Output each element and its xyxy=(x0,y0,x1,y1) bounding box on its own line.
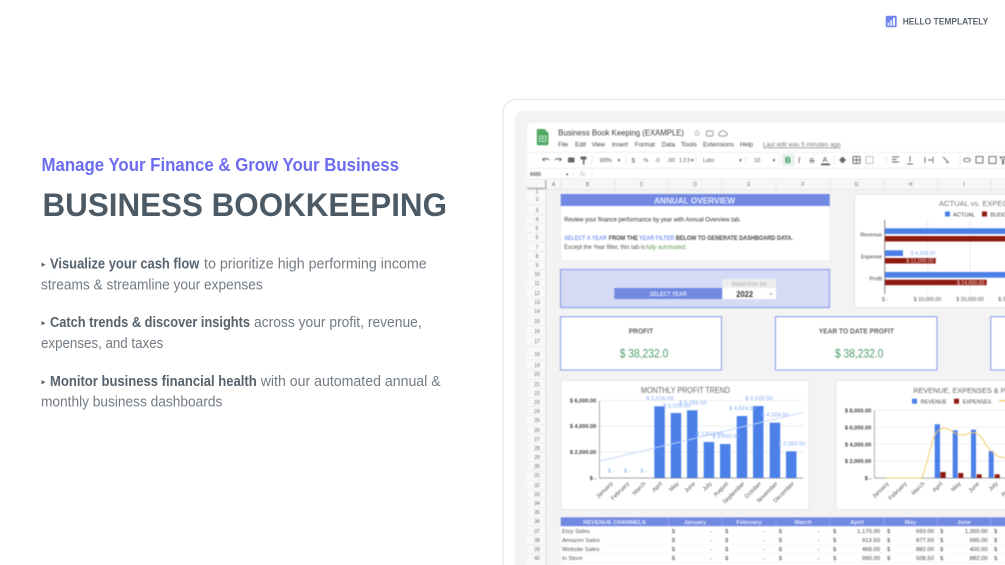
chart: monthly profit trend: $ 4,000.00 xyxy=(570,424,596,430)
row numbers: 24 xyxy=(534,409,540,415)
row numbers: 17 xyxy=(534,339,540,345)
kpi card: year to date profit xyxy=(776,317,937,370)
row numbers: 5 xyxy=(536,226,539,232)
table: revenue channels: $ xyxy=(940,556,944,562)
chart: revenue, expenses and profit: June xyxy=(968,481,981,494)
sheets window header: File xyxy=(558,142,568,148)
chart: actual vs expected: Revenue xyxy=(860,233,882,239)
chart: monthly profit trend: $ 2,083.50 xyxy=(778,441,805,447)
table: revenue channels: 468.00 xyxy=(862,547,881,553)
chart: monthly profit trend: $ - xyxy=(590,476,596,482)
chart: monthly profit trend: $ - xyxy=(640,468,647,474)
kpi card: profit: $ 38,232.0 xyxy=(620,348,668,360)
formula bar xyxy=(527,168,1005,179)
table: revenue channels: 877.50 xyxy=(916,538,935,544)
table: revenue channels: May xyxy=(905,520,917,526)
table: revenue channels: $ xyxy=(672,547,676,553)
table: revenue channels: $ xyxy=(779,538,783,544)
column headers xyxy=(527,179,1005,190)
chart: monthly profit trend: $ - xyxy=(624,468,631,474)
row numbers: 8 xyxy=(536,254,539,260)
table: revenue channels: - xyxy=(710,547,712,553)
logo: Hello Templately: HELLO TEMPLATELY xyxy=(903,16,989,26)
bullet 1: visualize cash flow: streams & streamline your expenses xyxy=(41,276,263,293)
row numbers: 21 xyxy=(534,382,540,388)
table: revenue channels: February xyxy=(736,520,762,526)
table: revenue channels: $ xyxy=(725,538,729,544)
sheets window header: View xyxy=(592,142,605,148)
chart: monthly profit trend: April xyxy=(651,481,664,494)
chart: revenue, expenses and profit: $ 2,000.00 xyxy=(845,459,871,465)
table: revenue channels: March xyxy=(794,520,812,526)
chart: monthly profit trend: March xyxy=(632,481,647,497)
bullet 1: visualize cash flow xyxy=(41,255,427,293)
table: revenue channels: $ xyxy=(887,547,891,553)
chart: revenue, expenses and profit: $ 4,000.00 xyxy=(845,442,871,448)
row numbers: 13 xyxy=(534,300,540,306)
chart: actual vs expected: $ 4,356.00 xyxy=(911,251,935,257)
row numbers: 23 xyxy=(534,400,540,406)
column headers: A xyxy=(552,182,556,188)
row numbers: 19 xyxy=(534,363,540,369)
formula bar: ▾ xyxy=(566,172,569,178)
chart: actual vs expected: $ 12,000.00 xyxy=(906,259,934,265)
bullet 2: catch trends: expenses, and taxes xyxy=(41,335,164,352)
table: revenue channels: June xyxy=(957,520,972,526)
row numbers: 27 xyxy=(534,437,540,443)
bullet 3: monitor financial health: with our automated annual & xyxy=(260,373,441,390)
sheets window header: Business Book Keeping (EXAMPLE) xyxy=(558,128,684,138)
sheets window header: ☆ xyxy=(693,128,701,138)
column headers: D xyxy=(693,182,697,188)
table: revenue channels: $ xyxy=(994,538,998,544)
sheets toolbar: $ xyxy=(632,157,636,164)
chart: revenue, expenses and profit: February xyxy=(888,481,908,502)
bullet 2: catch trends: across your profit, revenue, xyxy=(254,314,422,331)
sheets toolbar: 100% xyxy=(599,158,612,164)
sheets toolbar: .0 xyxy=(655,158,660,164)
row numbers: 10 xyxy=(534,272,540,278)
table: revenue channels: $ xyxy=(725,547,729,553)
sheets toolbar xyxy=(527,152,1005,168)
table: revenue channels: $ xyxy=(994,547,998,553)
logo: Hello Templately xyxy=(886,16,989,27)
bullet 2: catch trends: Catch trends & discover insights xyxy=(50,314,250,331)
panel: annual overview: SELECT A YEAR xyxy=(564,235,607,242)
sheets window header: Edit xyxy=(575,142,586,148)
table: revenue channels: $ xyxy=(887,529,891,535)
panel: annual overview: Review your finance performance by year with Annual Overview tab. xyxy=(564,217,741,224)
row numbers: 32 xyxy=(534,483,540,489)
bullet 2: catch trends xyxy=(41,314,422,352)
sheets toolbar: ▾ xyxy=(618,158,620,164)
subheading: Manage Your Finance & Grow Your Business xyxy=(42,155,399,175)
panel: year selector: 2022 xyxy=(736,290,754,299)
chart: monthly profit trend: $ 5,026.50 xyxy=(663,403,690,409)
chart: revenue, expenses and profit: $ - xyxy=(865,476,871,482)
chart: monthly profit trend: September xyxy=(722,481,746,505)
sheets toolbar: B xyxy=(785,156,791,165)
chart: monthly profit trend: $ 2,655.00 xyxy=(712,434,740,440)
chart legend xyxy=(912,399,1005,405)
gray tablet panel xyxy=(515,111,1005,565)
panel: annual overview: . xyxy=(685,245,687,251)
row numbers: 40 xyxy=(534,556,540,562)
table: revenue channels: $ xyxy=(833,529,837,535)
chart: actual vs expected xyxy=(855,194,1005,307)
row numbers: 4 xyxy=(536,217,539,223)
row numbers: 30 xyxy=(534,464,540,470)
chart: monthly profit trend: MONTHLY PROFIT TREND xyxy=(641,386,730,395)
row numbers: 35 xyxy=(534,510,540,516)
table: revenue channels: 400.50 xyxy=(970,547,988,553)
chart: revenue, expenses and profit: March xyxy=(911,481,926,497)
row numbers: 38 xyxy=(534,538,540,544)
icon: google sheets xyxy=(537,129,548,145)
chart: monthly profit trend: $ 5,620.50 xyxy=(745,396,773,402)
sheets toolbar: ▾ xyxy=(772,158,776,164)
chart: revenue, expenses and profit: May xyxy=(950,481,962,493)
row numbers: 33 xyxy=(534,492,540,498)
chart: monthly profit trend: $ 4,324.50 xyxy=(761,412,789,418)
table: revenue channels: 585.00 xyxy=(970,538,988,544)
chart: monthly profit trend: October xyxy=(744,481,763,500)
sheets toolbar: A xyxy=(822,155,828,164)
chart: monthly profit trend: May xyxy=(668,481,680,493)
table: revenue channels: $ xyxy=(833,538,837,544)
table: revenue channels: 1,170.00 xyxy=(857,529,881,535)
monthly bars xyxy=(654,406,796,478)
chart: actual vs expected: $ - xyxy=(882,297,888,303)
sheets toolbar: Lato xyxy=(703,158,714,164)
table: revenue channels: $ xyxy=(672,538,676,544)
row numbers: 9 xyxy=(536,263,539,269)
table: revenue channels: $ xyxy=(940,538,944,544)
table: revenue channels: $ xyxy=(833,556,837,562)
row numbers: 37 xyxy=(534,529,540,535)
panel: annual overview: Except the Year filter, this tab is xyxy=(564,245,645,251)
sheets window header: Extensions xyxy=(703,142,735,148)
table: revenue channels: 990.00 xyxy=(862,556,881,562)
kpi card: profit: PROFIT xyxy=(629,327,654,336)
chart: monthly profit trend: $ 4,824.00 xyxy=(729,406,756,412)
title: BUSINESS BOOKKEEPING xyxy=(42,187,447,223)
chart: monthly profit trend: August xyxy=(713,481,730,498)
sheets toolbar: ▾ xyxy=(739,158,742,164)
chart legend xyxy=(945,212,1005,218)
chart: monthly profit trend: $ 5,616.00 xyxy=(646,396,674,402)
chart legend: REVENUE xyxy=(921,399,947,405)
table: revenue channels: $ xyxy=(887,538,891,544)
row numbers: 11 xyxy=(534,281,540,287)
chart: revenue, expenses and profit: January xyxy=(872,481,890,500)
panel: annual overview xyxy=(561,194,830,261)
sheets window header: Last edit was 5 minutes ago xyxy=(763,142,841,148)
row numbers: 2 xyxy=(536,197,539,203)
row numbers: 16 xyxy=(534,329,540,335)
row numbers: 39 xyxy=(534,547,540,553)
table: revenue channels: $ xyxy=(940,529,944,535)
row numbers: 25 xyxy=(534,418,540,424)
row numbers: 12 xyxy=(534,291,540,297)
table: revenue channels: 508.50 xyxy=(916,556,935,562)
table: revenue channels: - xyxy=(764,547,766,553)
row numbers: 36 xyxy=(534,519,540,525)
table: revenue channels: 693.00 xyxy=(916,529,935,535)
table: revenue channels: April xyxy=(850,520,864,526)
table: revenue channels: - xyxy=(710,556,712,562)
table: revenue channels: - xyxy=(818,556,820,562)
row numbers: 14 xyxy=(534,309,540,315)
table: revenue channels: In Store xyxy=(562,556,583,562)
row numbers: 34 xyxy=(534,501,540,507)
panel: annual overview: BELOW TO GENERATE DASHBOARD DATA. xyxy=(676,235,793,242)
sheets window header: Format xyxy=(635,142,655,148)
sheets window header xyxy=(527,123,1005,152)
column headers: B xyxy=(586,182,590,188)
bullet 1: visualize cash flow: to prioritize high performing income xyxy=(204,255,427,272)
table: revenue channels: - xyxy=(710,538,712,544)
table: revenue channels: 882.00 xyxy=(970,556,988,562)
spreadsheet screenshot frame xyxy=(503,100,1005,565)
column headers: E xyxy=(747,182,751,188)
chart: monthly profit trend xyxy=(561,381,809,510)
row numbers: 26 xyxy=(534,428,540,434)
chart: revenue, expenses and profit xyxy=(836,381,1005,510)
table: revenue channels: Etsy Sales xyxy=(562,529,590,535)
sheets toolbar: % xyxy=(644,158,648,164)
row numbers: 1 xyxy=(536,190,539,196)
row numbers: 6 xyxy=(536,235,539,241)
table: revenue channels: - xyxy=(710,529,712,535)
kpi card: year to date profit: YEAR TO DATE PROFIT xyxy=(819,327,894,336)
row numbers xyxy=(527,190,546,565)
table: revenue channels: Amazon Sales xyxy=(562,538,600,544)
chart: monthly profit trend: January xyxy=(596,481,614,500)
chart: revenue, expenses and profit: $ 8,000.00 xyxy=(845,408,871,414)
table: revenue channels: January xyxy=(684,520,707,526)
table: revenue channels: - xyxy=(764,529,766,535)
panel: year selector: SELECT YEAR xyxy=(650,291,687,298)
row numbers: 20 xyxy=(534,372,540,378)
spreadsheet screenshot xyxy=(515,111,1005,565)
table: revenue channels: $ xyxy=(940,547,944,553)
chart: monthly profit trend: $ 2,813.50 xyxy=(696,432,723,438)
chart: monthly profit trend: June xyxy=(684,481,697,494)
column headers: F xyxy=(801,182,805,188)
bullet 3: monitor financial health: monthly business dashboards xyxy=(41,394,223,411)
sheets toolbar: .00 xyxy=(667,158,675,164)
sheets window header: Insert xyxy=(612,142,628,148)
table: revenue channels xyxy=(561,517,1005,565)
chart: revenue, expenses and profit: $ 6,000.00 xyxy=(845,425,871,431)
table: revenue channels: - xyxy=(818,538,820,544)
table: revenue channels: - xyxy=(818,547,820,553)
table: revenue channels: $ xyxy=(672,529,676,535)
table: revenue channels: - xyxy=(818,529,820,535)
kpi card: year to date profit: $ 38,232.0 xyxy=(835,348,883,360)
formula bar: fx xyxy=(580,172,586,178)
chart: monthly profit trend: February xyxy=(610,481,631,502)
panel: year selector xyxy=(560,270,830,308)
table: revenue channels: $ xyxy=(779,556,783,562)
panel: annual overview: fully automated xyxy=(646,245,686,251)
row numbers: 7 xyxy=(536,245,539,251)
chart legend: EXPENSES xyxy=(963,399,992,405)
row numbers: 31 xyxy=(534,473,540,479)
column headers: I xyxy=(963,182,965,188)
chart: monthly profit trend: July xyxy=(702,481,713,493)
table: revenue channels: 882.00 xyxy=(916,547,935,553)
row numbers: 18 xyxy=(534,352,540,358)
row numbers: 3 xyxy=(536,208,539,214)
panel: annual overview: ANNUAL OVERVIEW xyxy=(654,196,735,206)
chart: actual vs expected: $ 10,000.00 xyxy=(914,297,941,303)
bullet 3: monitor financial health xyxy=(41,373,441,411)
sheets toolbar: I xyxy=(798,156,801,165)
chart legend: ACTUAL xyxy=(953,212,975,218)
kpi card: profit xyxy=(560,317,722,370)
table: revenue channels: $ xyxy=(994,529,998,535)
sheets toolbar: 123 xyxy=(679,158,690,164)
sheets window header: Help xyxy=(740,142,753,148)
chart: monthly profit trend: $ 2,000.00 xyxy=(570,450,596,456)
table: revenue channels: $ xyxy=(779,529,783,535)
table: revenue channels: $ xyxy=(779,547,783,553)
sheets window header: Tools xyxy=(681,142,698,148)
chart: monthly profit trend: November xyxy=(756,481,779,504)
formula bar: M86 xyxy=(530,172,541,178)
table: revenue channels: - xyxy=(764,556,766,562)
bullet 1: visualize cash flow: Visualize your cash flow xyxy=(50,255,199,272)
sheets toolbar: ▾ xyxy=(691,158,694,164)
table: revenue channels: - xyxy=(764,538,766,544)
table: revenue channels: $ xyxy=(994,556,998,562)
chart: actual vs expected: Expense xyxy=(861,255,882,261)
sheets toolbar: S xyxy=(810,156,815,165)
panel: annual overview: FROM THE xyxy=(609,235,638,242)
chart: revenue, expenses and profit: July xyxy=(988,481,999,493)
row numbers: 22 xyxy=(534,391,540,397)
panel: year selector: Select from list xyxy=(732,282,767,288)
table: revenue channels: $ xyxy=(725,529,729,535)
panel: annual overview: YEAR FILTER xyxy=(639,235,675,242)
row numbers: 15 xyxy=(534,319,540,325)
table: revenue channels: $ xyxy=(725,556,729,562)
chart: monthly profit trend: December xyxy=(773,481,796,504)
column headers: H xyxy=(909,182,913,188)
row numbers: 28 xyxy=(534,446,540,452)
chart: monthly profit trend: $ 6,000.00 xyxy=(570,399,596,405)
chart: actual vs expected: $ 20,000.00 xyxy=(956,297,984,303)
table: revenue channels: Website Sales xyxy=(562,547,600,553)
sheets toolbar: 10 xyxy=(754,158,760,164)
chart: revenue, expenses and profit: April xyxy=(932,481,944,494)
chart: monthly profit trend: $ 5,269.50 xyxy=(679,400,707,406)
row numbers: 29 xyxy=(534,455,540,461)
kpi card: cropped third card xyxy=(991,317,1005,370)
table: revenue channels: REVENUE CHANNELS xyxy=(583,520,646,526)
table: revenue channels: $ xyxy=(833,547,837,553)
bullet 3: monitor financial health: Monitor business financial health xyxy=(50,373,257,390)
table: revenue channels: $ xyxy=(887,556,891,562)
column headers: C xyxy=(640,182,644,188)
chart: actual vs expected: Profit xyxy=(869,276,882,282)
chart: actual vs expected: $ 24,000.00 xyxy=(957,280,985,286)
table: revenue channels: $ xyxy=(672,556,676,562)
chart: monthly profit trend: $ - xyxy=(608,468,614,474)
table: revenue channels: 913.50 xyxy=(862,538,881,544)
sheets window header: Data xyxy=(662,142,675,148)
table: revenue channels: 1,350.00 xyxy=(965,529,988,535)
column headers: G xyxy=(855,182,859,188)
